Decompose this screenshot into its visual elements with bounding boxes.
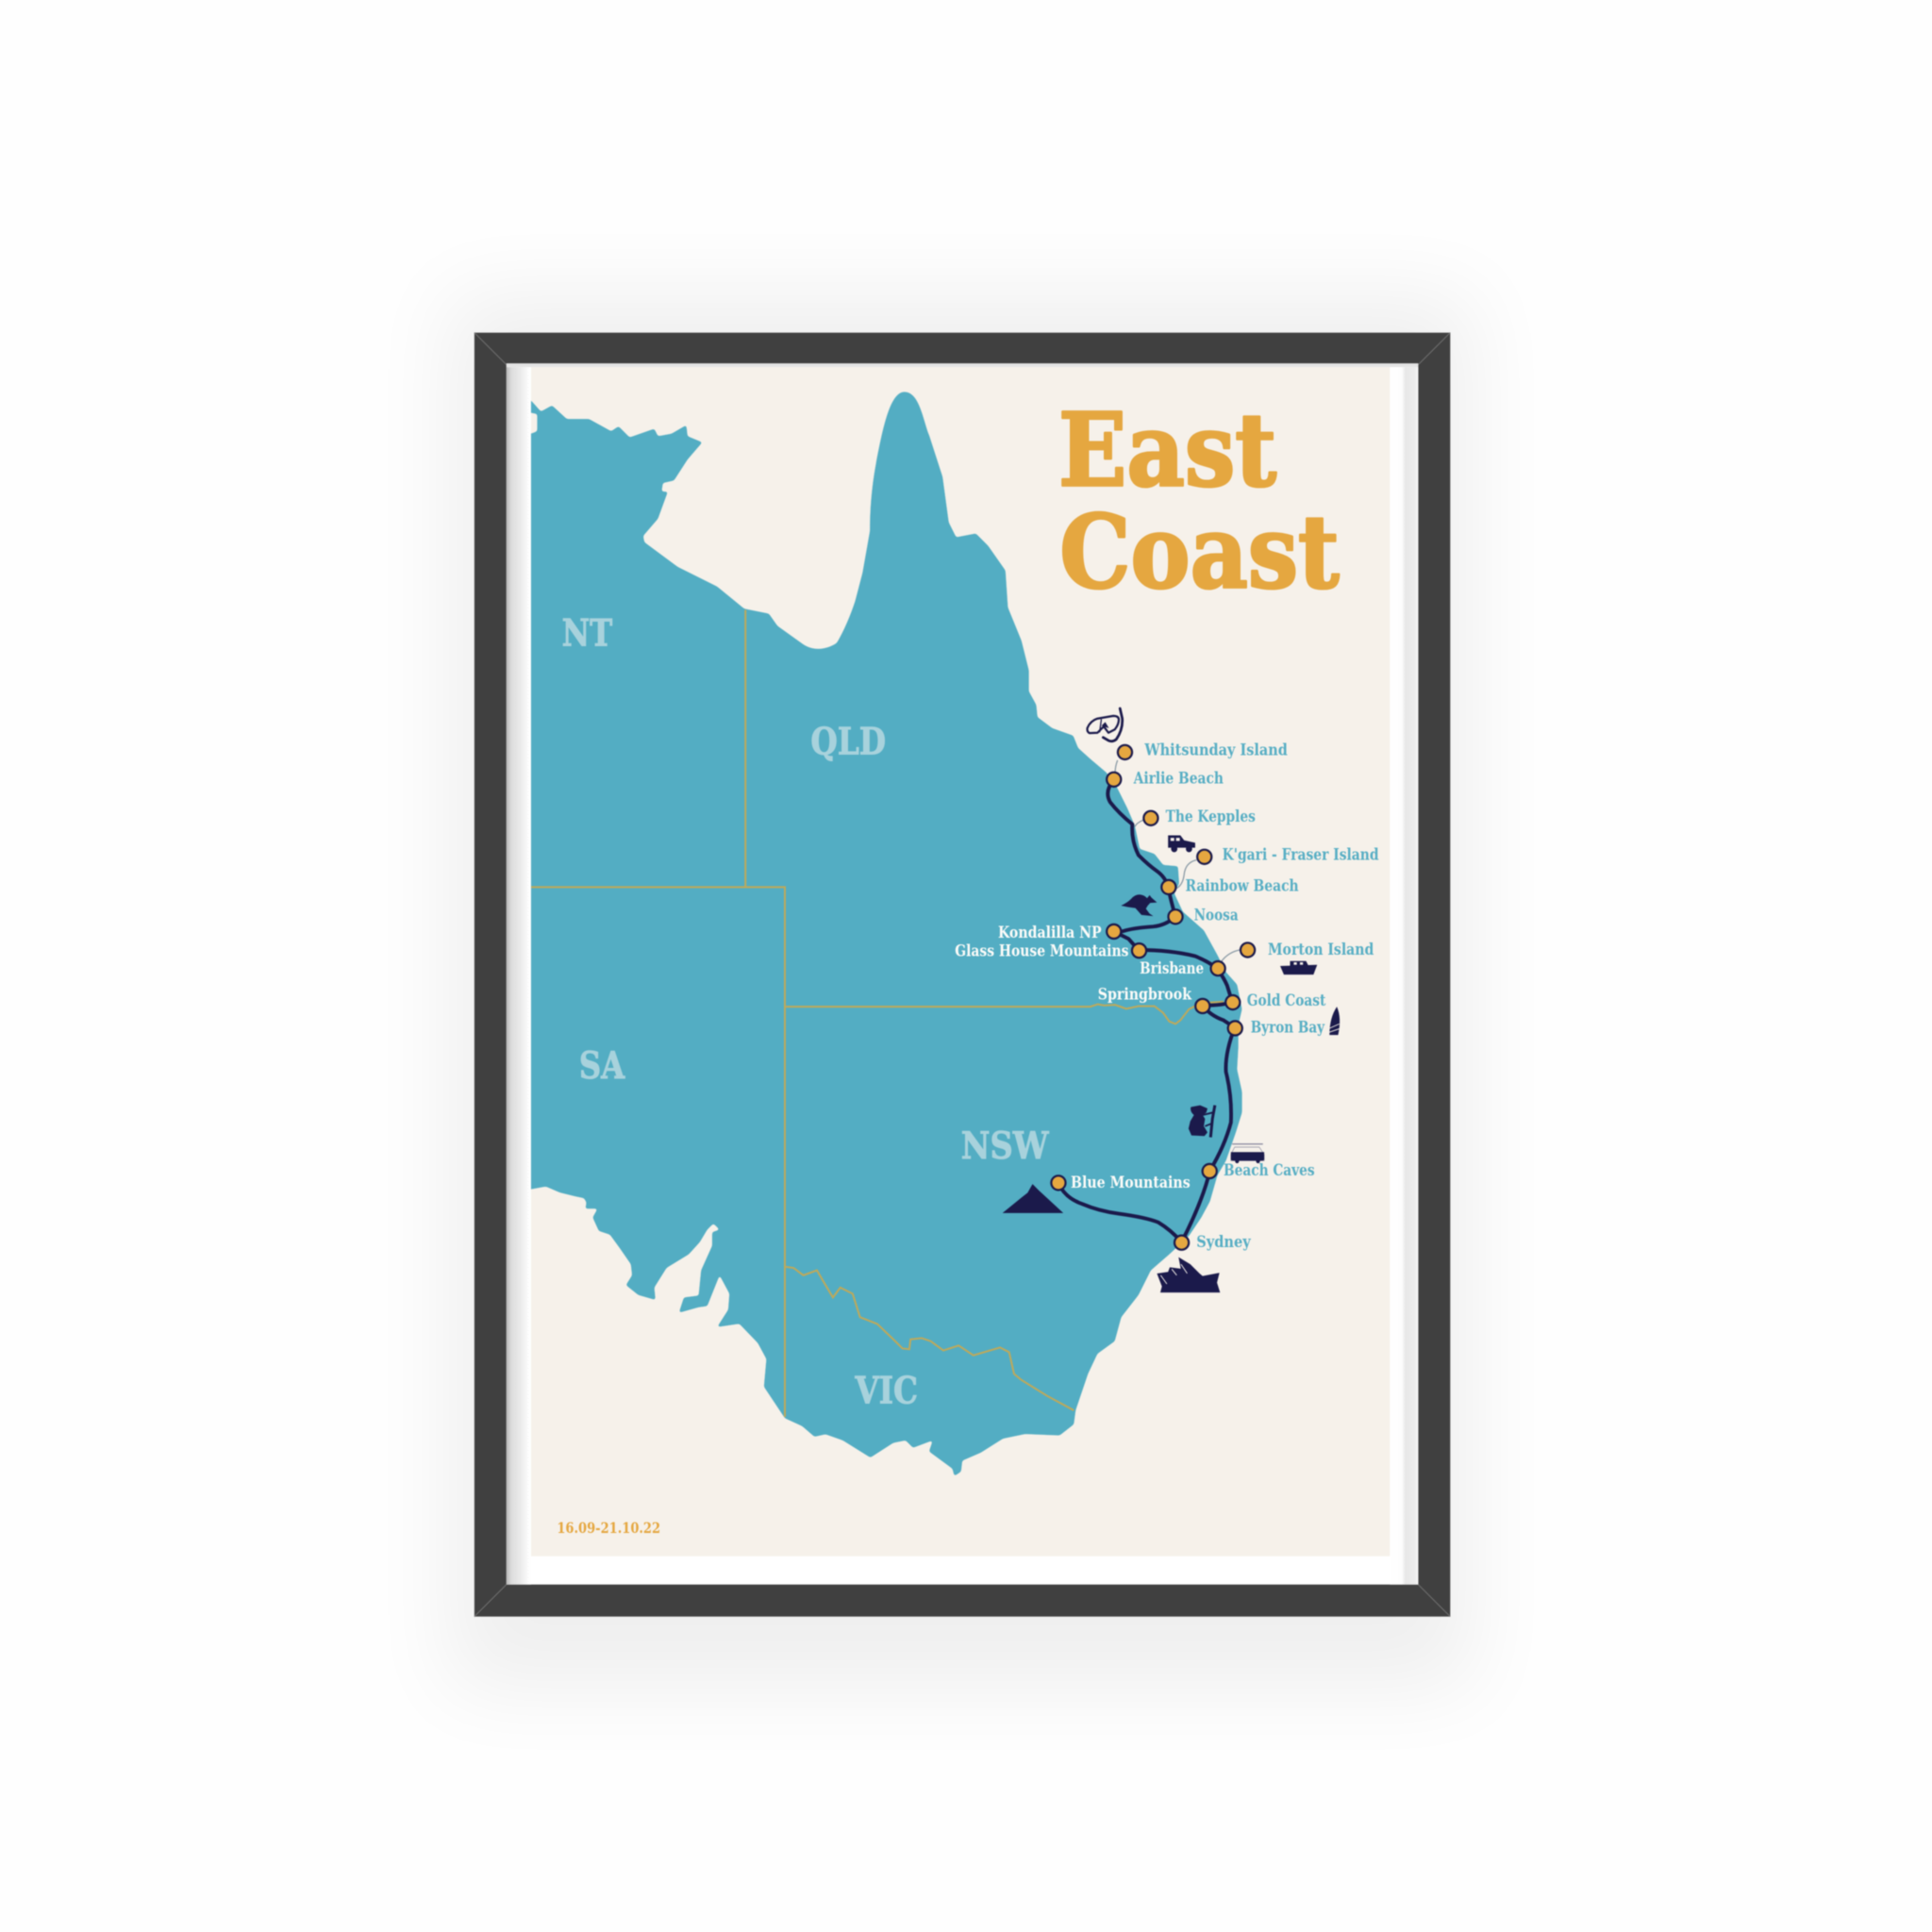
coastal place labels: Beach Caves <box>1224 1161 1315 1180</box>
date: 16.09-21.10.22 <box>557 1519 660 1537</box>
route connectors <box>1115 760 1240 963</box>
state labels: SA <box>579 1044 625 1088</box>
coastal place labels: K'gari - Fraser Island <box>1223 846 1379 865</box>
inland place labels: Springbrook <box>1098 985 1192 1004</box>
coastal place labels: The Kepples <box>1166 808 1256 826</box>
frame shadow <box>450 295 1473 1688</box>
inland place labels: Kondalilla NP <box>998 924 1102 942</box>
icon: snorkel <box>1088 708 1123 741</box>
icon: jeep <box>1168 836 1195 852</box>
state labels: NSW <box>961 1124 1049 1168</box>
state labels <box>562 611 1049 1413</box>
inland place labels: Glass House Mountains <box>955 942 1128 961</box>
inland place labels: Blue Mountains <box>1071 1174 1191 1192</box>
map of eastern Australia <box>511 391 1242 1476</box>
icon: Sydney Opera House <box>1157 1257 1220 1292</box>
inland place labels <box>955 924 1204 1192</box>
state labels: VIC <box>855 1370 918 1413</box>
route stops <box>1051 745 1255 1250</box>
icon: koala <box>1189 1106 1215 1138</box>
icon: mountain <box>1003 1184 1063 1213</box>
coastal place labels: Whitsunday Island <box>1144 741 1288 760</box>
coastal place labels: Rainbow Beach <box>1185 876 1299 895</box>
title: Coast <box>1059 492 1340 611</box>
coastal place labels: Airlie Beach <box>1133 770 1224 789</box>
icon: boat <box>1280 961 1317 974</box>
state labels: NT <box>562 611 612 655</box>
title: East <box>1058 391 1276 510</box>
icon: camper van <box>1231 1143 1264 1163</box>
state borders <box>531 610 1224 1417</box>
coastal place labels: Sydney <box>1196 1233 1252 1252</box>
coastal place labels: Morton Island <box>1268 941 1374 959</box>
coastal place labels: Byron Bay <box>1251 1019 1325 1038</box>
coastal place labels: Noosa <box>1194 907 1239 925</box>
picture frame <box>475 333 1450 1617</box>
inland place labels: Brisbane <box>1140 959 1204 978</box>
travel route <box>1058 780 1235 1242</box>
icon: surfboard <box>1328 1007 1340 1035</box>
icon: kangaroo <box>1121 894 1157 916</box>
coastal place labels: Gold Coast <box>1247 991 1326 1010</box>
poster background <box>531 367 1390 1557</box>
coastal place labels <box>1133 741 1379 1252</box>
state labels: QLD <box>810 720 886 763</box>
title <box>1058 391 1340 611</box>
